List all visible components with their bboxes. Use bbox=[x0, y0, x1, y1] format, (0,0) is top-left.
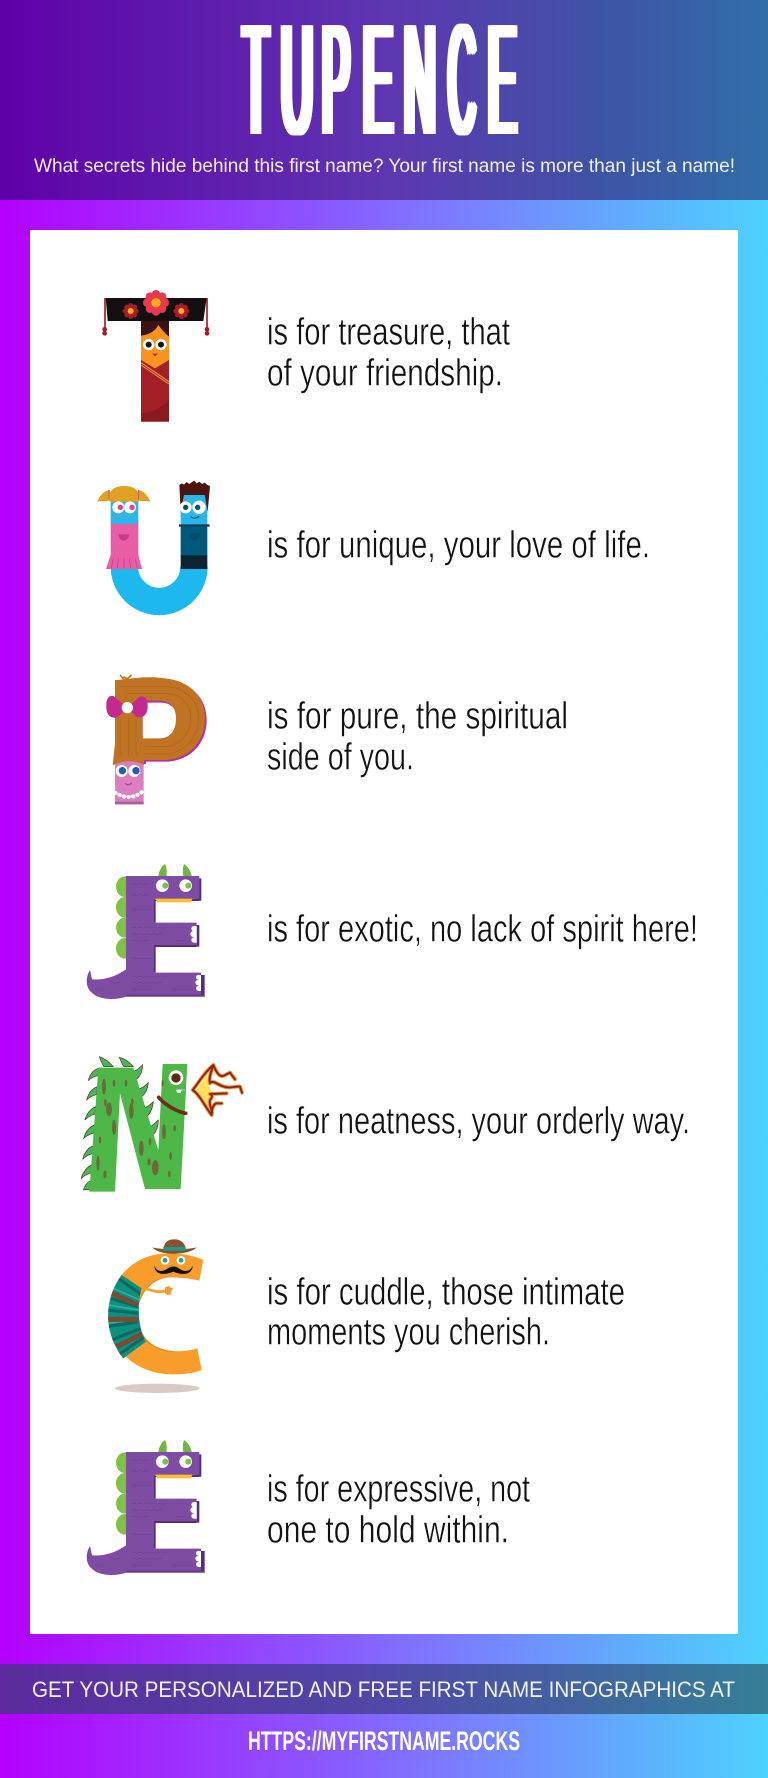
text: C: moments you cherish. bbox=[267, 1312, 550, 1354]
text: E expressive: one to hold within. bbox=[267, 1510, 509, 1552]
icon: letter C character bbox=[103, 1239, 203, 1393]
text: U: is for unique, your love of life. bbox=[267, 524, 650, 566]
subtitle: What secrets hide behind this first name? Your first name is more than just a name! bbox=[34, 155, 735, 177]
icon: fire breath bbox=[193, 1065, 242, 1115]
icon: letter T character bbox=[102, 290, 209, 422]
title bbox=[240, 0, 518, 168]
footer url: HTTPS://MYFIRSTNAME.ROCKS bbox=[248, 1726, 520, 1756]
icon: letter P character bbox=[106, 675, 207, 804]
text: T bbox=[267, 312, 510, 394]
text: C bbox=[267, 1272, 625, 1354]
header band bbox=[0, 0, 768, 200]
footer band bbox=[0, 1664, 768, 1714]
text: C: is for cuddle, those intimate bbox=[267, 1272, 625, 1314]
icon: letter E dragon bbox=[87, 864, 205, 999]
text: T: is for treasure, that bbox=[267, 312, 510, 354]
text: T: of your friendship. bbox=[267, 352, 503, 394]
white card panel bbox=[30, 230, 738, 1634]
footer call to action: GET YOUR PERSONALIZED AND FREE FIRST NAME INFOGRAPHICS AT bbox=[32, 1677, 735, 1702]
text: P: is for pure, the spiritual bbox=[267, 696, 568, 738]
text: P: side of you. bbox=[267, 736, 414, 778]
icon: letter N dragon bbox=[81, 1057, 242, 1192]
text: E expressive bbox=[267, 1468, 530, 1552]
text: P bbox=[267, 696, 568, 778]
text: E expressive: is for expressive, not bbox=[267, 1468, 530, 1510]
icon: letter E dragon repeat bbox=[87, 1440, 205, 1575]
icon: letter U character bbox=[97, 481, 210, 601]
